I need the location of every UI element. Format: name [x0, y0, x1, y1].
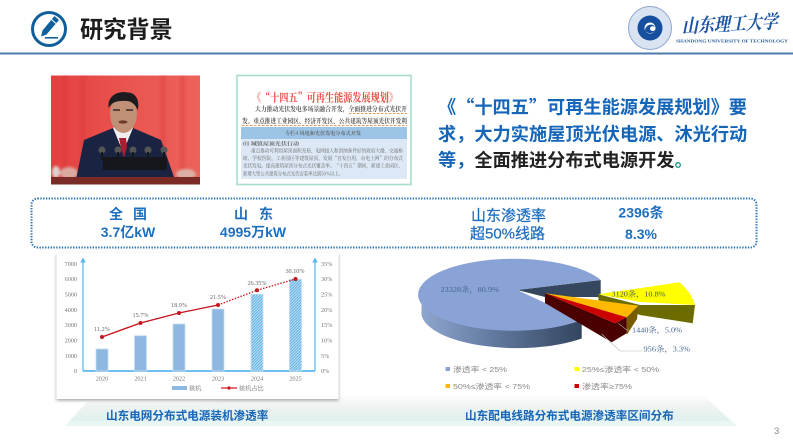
year labels: 2025 [289, 376, 302, 382]
stat: penetration label: 山东渗透率 [471, 208, 546, 224]
left axis labels: 2000 [65, 338, 77, 344]
pie legend: 50%≤渗透率 < 75% [453, 381, 530, 391]
slice: below 25% [418, 259, 601, 348]
text block: policy statement: 《“十四五”可再生能源发展规划》要 [438, 94, 747, 120]
data labels: 15.7% [133, 312, 148, 319]
left axis labels: 0 [74, 368, 77, 375]
left axis labels: 1000 [65, 353, 77, 360]
leader lines [602, 323, 643, 351]
share line [100, 277, 298, 339]
left axis labels: 5000 [65, 292, 77, 298]
caption: chart: 山东电网分布式电源装机渗透率 [106, 408, 269, 422]
document body [242, 104, 408, 125]
data labels: 26.35% [247, 280, 267, 287]
logo: Shandong University of Technology: SHANDONG UNIVERSITY OF TECHNOLOGY [676, 38, 789, 44]
data labels: 18.9% [171, 302, 187, 309]
pie legend: 渗透率≥75% [582, 381, 632, 391]
stat: penetration values: 8.3% [625, 226, 658, 242]
panel: planning document excerpt: 专栏4 风电和光伏发电分布式开发 [285, 130, 361, 137]
header rule [0, 52, 793, 54]
text block: policy statement: 求，大力实施屋顶光伏电源、沐光行动 [438, 120, 747, 146]
slice labels: 1440条，5.0% [632, 324, 682, 336]
data labels [94, 268, 305, 333]
caption ribbon [65, 395, 737, 426]
right axis labels: 35% [321, 261, 332, 268]
right axis labels: 5% [321, 353, 329, 360]
stat: penetration label [470, 208, 546, 242]
stat: Shandong: 4995万kW [220, 224, 287, 240]
stat: national [101, 206, 156, 240]
left axis labels: 3000 [65, 322, 77, 329]
stat: penetration values [618, 204, 664, 242]
year labels: 2020 [96, 376, 108, 382]
right axis labels: 10% [321, 338, 332, 344]
data labels: 11.2% [94, 326, 110, 333]
left axis labels: 6000 [65, 276, 77, 283]
left axis labels [65, 261, 77, 375]
slice: 25% to 50% [598, 282, 695, 323]
right axis labels: 0% [321, 368, 329, 375]
year labels: 2023 [212, 376, 224, 382]
caption: pie: 山东配电线路分布式电源渗透率区间分布 [465, 408, 674, 422]
callout: dotted stats box [32, 198, 756, 248]
document body: 大力推动光伏发电多场景融合开发，全面推进分布式光伏开 [255, 104, 408, 114]
document body: 发。重点推进工业园区、经济开发区、公共建筑等屋顶光伏开发利 [242, 116, 408, 125]
left axis labels: 7000 [65, 261, 77, 268]
bar and line chart: installed capacity [56, 253, 338, 399]
title: 研究背景 [80, 16, 173, 42]
right axis labels: 15% [321, 322, 332, 329]
right axis labels [321, 261, 332, 375]
year labels: 2022 [173, 376, 185, 382]
bars [96, 279, 302, 371]
text block: policy statement [438, 94, 747, 172]
panel: planning document excerpt: 光伏发电。提高建筑屋顶分布式光伏覆盖率。“十四五”期间，新建工业园区、 [243, 162, 403, 170]
left axis labels: 4000 [65, 307, 77, 314]
year labels [96, 376, 302, 382]
stat: Shandong [220, 206, 287, 240]
pie legend: 25%≤渗透率 < 50% [582, 364, 659, 374]
stat: national: 3.7亿kW [101, 224, 156, 240]
icon: pen in circle [32, 12, 66, 46]
slice labels: 3120条，10.8% [612, 288, 666, 300]
slice: over 75% [545, 293, 627, 342]
slice: 50% to 75% [545, 293, 638, 335]
pie legend: 渗透率 < 25% [453, 364, 507, 374]
panel: planning document excerpt [237, 76, 411, 184]
chart legend: 装机 [189, 384, 202, 392]
page number: 3 [774, 426, 779, 437]
right axis labels: 20% [321, 307, 332, 314]
stat: penetration values: 2396条 [618, 204, 664, 220]
data labels: 21.5% [210, 294, 226, 301]
photo: speaker at podium [51, 76, 200, 184]
stat: penetration label: 超50%线路 [470, 226, 545, 242]
pie chart: feeder penetration distribution [418, 259, 695, 391]
logo: Shandong University of Technology [628, 6, 789, 49]
slice labels [440, 284, 690, 354]
chart legend [172, 384, 264, 392]
stat: national: 全国 [109, 206, 147, 222]
right axis labels: 30% [321, 276, 332, 283]
right axis labels: 25% [321, 292, 332, 298]
slice labels: 23328条，80.9% [440, 284, 499, 295]
document heading: 《“十四五”可再生能源发展规划》 [252, 90, 398, 106]
chart legend: 装机占比 [239, 384, 264, 392]
data labels: 30.10% [285, 268, 305, 275]
year labels: 2024 [251, 376, 263, 382]
panel: planning document excerpt: 重点推动可利用屋顶面积充裕、电网接入和消纳条件好的政府大楼、交通枢 [251, 148, 403, 154]
axes [81, 258, 317, 371]
pie legend [446, 364, 659, 391]
panel: planning document excerpt: 01 城镇屋顶光伏行动 [243, 140, 299, 148]
slice labels: 956条，3.3% [644, 344, 690, 354]
panel: planning document excerpt: 新增大型公共建筑分布式光伏安装率达到50%以上。 [243, 170, 343, 178]
panel: planning document excerpt: 纽、学校医院、工业园区等建筑屋顶，发展“自发自用，余电上网”的分布式 [243, 155, 403, 162]
year labels: 2021 [134, 376, 147, 382]
text block: policy statement: 等，全面推进分布式电源开发。 [438, 146, 693, 172]
stat: Shandong: 山东 [234, 206, 273, 222]
